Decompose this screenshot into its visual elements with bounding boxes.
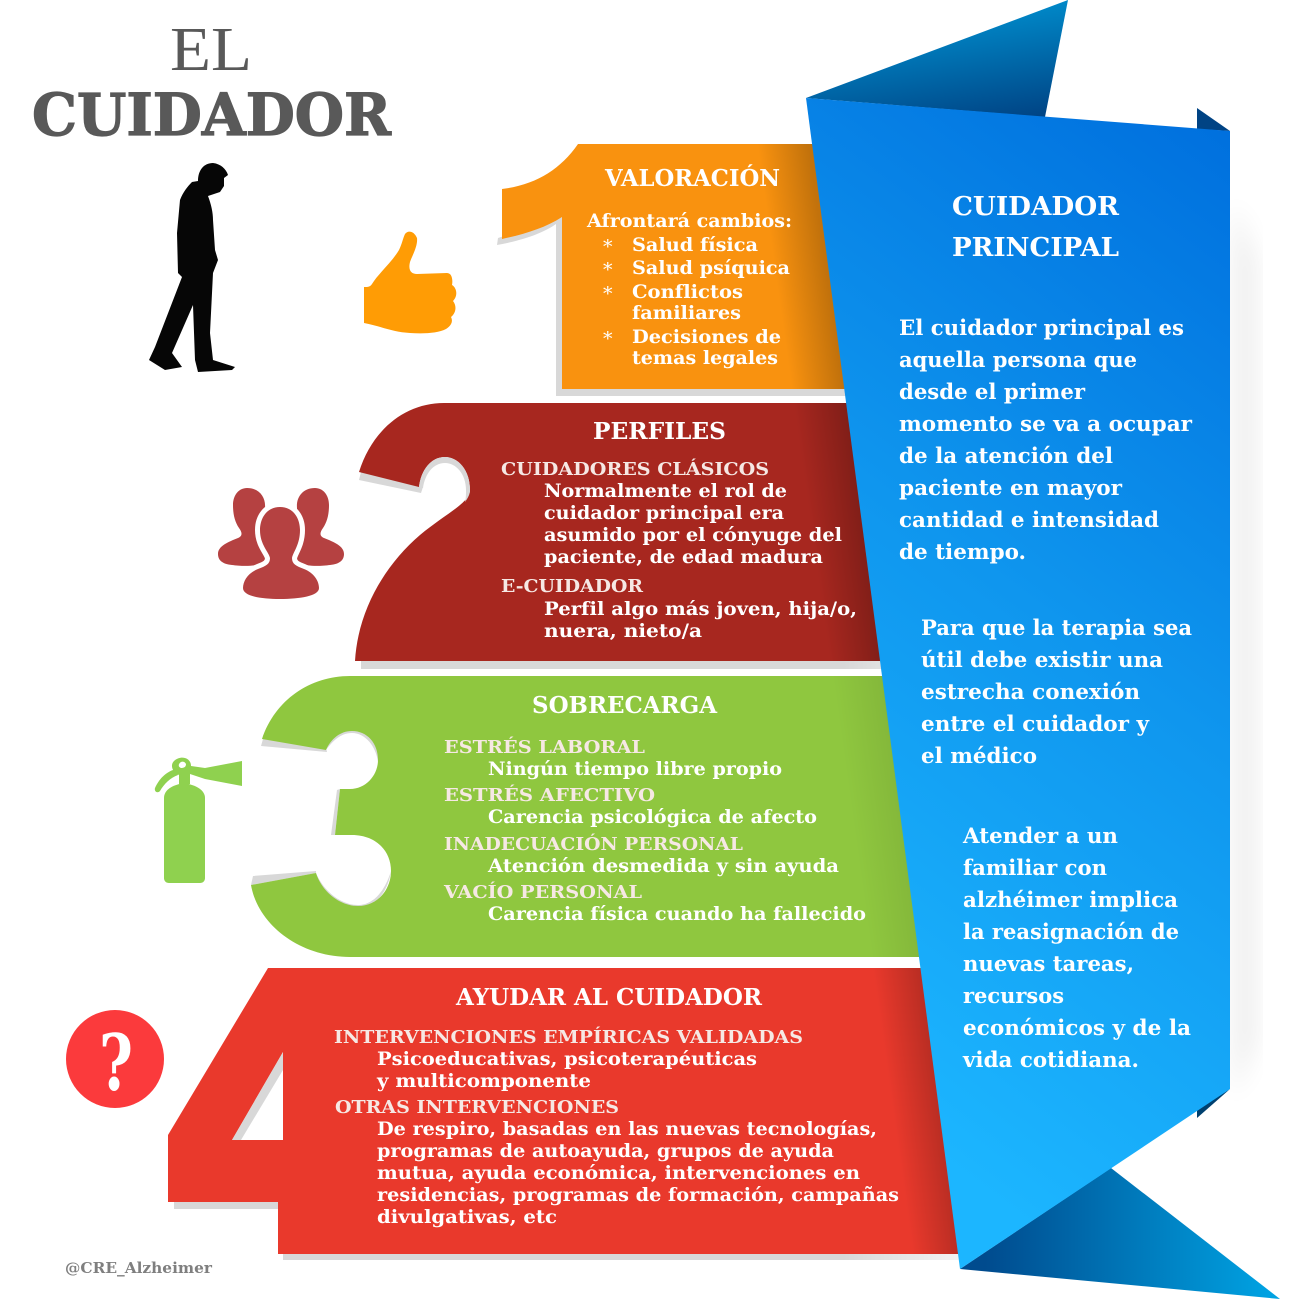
panel 1: valoración bbox=[497, 144, 900, 396]
text: atender: nuevas tareas, bbox=[963, 951, 1134, 976]
icon: man walking silhouette bbox=[149, 163, 235, 372]
text: definición: cantidad e intensidad bbox=[899, 507, 1159, 532]
ribbon fold: top right tab bbox=[1197, 108, 1230, 131]
text: cuidadores clásicos: paciente, de edad madura bbox=[544, 547, 823, 568]
text: intervenciones empíricas: y multicomponente bbox=[376, 1071, 591, 1092]
heading: cuidador principal: PRINCIPAL bbox=[952, 233, 1119, 263]
icon: thumbs up bbox=[364, 232, 456, 333]
text: tipos de sobrecarga: VACÍO PERSONAL bbox=[443, 880, 642, 903]
text: cuidadores clásicos: cuidador principal era bbox=[544, 503, 784, 524]
icon: question mark bbox=[66, 1010, 164, 1109]
list: cambios: * bbox=[603, 328, 613, 350]
text: atender: alzhéimer implica bbox=[963, 887, 1178, 912]
heading: cuidador principal bbox=[952, 192, 1119, 263]
text: definición: de tiempo. bbox=[899, 539, 1026, 564]
text: cuidadores clásicos: CUIDADORES CLÁSICOS bbox=[501, 457, 769, 480]
text: otras intervenciones: De respiro, basadas en las nuevas tecnologías, bbox=[377, 1119, 877, 1140]
ribbon fold: bottom bbox=[960, 1168, 1280, 1299]
text: tipos de sobrecarga: Carencia psicológica de afecto bbox=[488, 807, 817, 828]
text: cuidadores clásicos bbox=[501, 457, 842, 568]
text: definición: aquella persona que bbox=[899, 347, 1137, 372]
ribbon fold: bottom right tab bbox=[1197, 1089, 1230, 1118]
text: e-cuidador: nuera, nieto/a bbox=[544, 621, 702, 642]
text: definición: El cuidador principal es bbox=[899, 315, 1184, 340]
title: EL bbox=[170, 16, 252, 84]
heading: ayudar al cuidador: AYUDAR AL CUIDADOR bbox=[455, 984, 763, 1011]
list: cambios: Decisiones de bbox=[632, 327, 781, 348]
text: terapia: entre el cuidador y bbox=[921, 711, 1150, 736]
hole shadow: perfiles bbox=[419, 457, 470, 502]
text: terapia: estrecha conexión bbox=[921, 679, 1140, 704]
text: tipos de sobrecarga: Atención desmedida y sin ayuda bbox=[487, 856, 839, 877]
text: tipos de sobrecarga: ESTRÉS LABORAL bbox=[444, 735, 645, 758]
text: terapia: útil debe existir una bbox=[921, 647, 1163, 672]
text: terapia bbox=[921, 615, 1192, 768]
text: otras intervenciones: residencias, programas de formación, campañas bbox=[377, 1185, 899, 1206]
panel 4: ayudar al cuidador bbox=[168, 968, 970, 1260]
edge shading: valoración bbox=[700, 144, 880, 389]
credit: @CRE_Alzheimer bbox=[65, 1259, 213, 1277]
text: terapia: Para que la terapia sea bbox=[921, 615, 1192, 640]
icon: fire extinguisher bbox=[155, 758, 242, 883]
text: e-cuidador: E-CUIDADOR bbox=[501, 576, 644, 597]
text: cuidadores clásicos: asumido por el cónyuge del bbox=[544, 525, 842, 546]
heading: sobrecarga: SOBRECARGA bbox=[532, 692, 718, 719]
text: tipos de sobrecarga bbox=[443, 735, 866, 925]
text: definición: momento se va a ocupar bbox=[899, 411, 1193, 436]
icon: group of people bbox=[218, 488, 344, 599]
list: cambios bbox=[586, 211, 792, 369]
text: definición: paciente en mayor bbox=[899, 475, 1123, 500]
heading: valoración: VALORACIÓN bbox=[604, 165, 780, 192]
title bbox=[32, 16, 392, 149]
text: tipos de sobrecarga: Carencia física cuando ha fallecido bbox=[488, 904, 866, 925]
text: intervenciones empíricas: INTERVENCIONES EMPÍRICAS VALIDADAS bbox=[334, 1025, 803, 1048]
text: definición bbox=[899, 315, 1193, 564]
text: otras intervenciones: divulgativas, etc bbox=[377, 1207, 557, 1228]
text: otras intervenciones: OTRAS INTERVENCIONES bbox=[335, 1097, 619, 1118]
text: otras intervenciones bbox=[335, 1097, 899, 1228]
text: definición: de la atención del bbox=[899, 443, 1113, 468]
text: otras intervenciones: programas de autoayuda, grupos de ayuda bbox=[377, 1141, 834, 1162]
list: cambios: * bbox=[603, 283, 613, 305]
text: terapia: el médico bbox=[921, 743, 1037, 768]
edge shading: ayudar bbox=[860, 968, 970, 1254]
text: tipos de sobrecarga: INADECUACIÓN PERSONAL bbox=[444, 832, 743, 855]
text: intervenciones empíricas bbox=[334, 1025, 803, 1092]
text: atender: vida cotidiana. bbox=[962, 1047, 1139, 1072]
text: e-cuidador bbox=[501, 576, 857, 642]
list: cambios: familiares bbox=[632, 303, 741, 324]
text: atender bbox=[962, 823, 1191, 1072]
text: atender: la reasignación de bbox=[963, 919, 1179, 944]
text: atender: Atender a un bbox=[962, 823, 1118, 848]
edge shading: sobrecarga bbox=[800, 676, 930, 957]
panel 3: sobrecarga bbox=[251, 676, 930, 957]
text: e-cuidador: Perfil algo más joven, hija/o, bbox=[544, 599, 857, 620]
panel 2: perfiles bbox=[355, 403, 900, 669]
text: atender: económicos y de la bbox=[963, 1015, 1191, 1040]
list: cambios: Salud psíquica bbox=[632, 258, 790, 279]
list: cambios: * bbox=[603, 236, 613, 258]
title: CUIDADOR bbox=[32, 81, 392, 149]
text: atender: familiar con bbox=[963, 855, 1107, 880]
icon: question mark: ? bbox=[99, 1018, 133, 1109]
heading: cuidador principal: CUIDADOR bbox=[952, 192, 1119, 222]
text: tipos de sobrecarga: Ningún tiempo libre propio bbox=[488, 759, 782, 780]
ribbon main panel bbox=[806, 98, 1230, 1269]
text: otras intervenciones: mutua, ayuda económica, intervenciones en bbox=[377, 1163, 861, 1184]
text: cuidadores clásicos: Normalmente el rol de bbox=[544, 481, 787, 502]
text: intervenciones empíricas: Psicoeducativas, psicoterapéuticas bbox=[377, 1049, 757, 1070]
ribbon fold: top bbox=[806, 0, 1068, 117]
text: atender: recursos bbox=[963, 983, 1064, 1008]
list: cambios: * bbox=[603, 259, 613, 281]
list: cambios: Salud física bbox=[632, 235, 758, 256]
heading: perfiles: PERFILES bbox=[593, 418, 726, 445]
list: cambios: Conflictos bbox=[632, 282, 743, 303]
edge shading: perfiles bbox=[760, 403, 890, 661]
list: cambios: temas legales bbox=[632, 348, 778, 369]
text: tipos de sobrecarga: ESTRÉS AFECTIVO bbox=[444, 783, 655, 806]
list: cambios: Afrontará cambios: bbox=[586, 211, 792, 232]
blue ribbon bbox=[806, 0, 1280, 1299]
hole shadow: ayudar bbox=[232, 1052, 283, 1140]
text: definición: desde el primer bbox=[899, 379, 1086, 404]
